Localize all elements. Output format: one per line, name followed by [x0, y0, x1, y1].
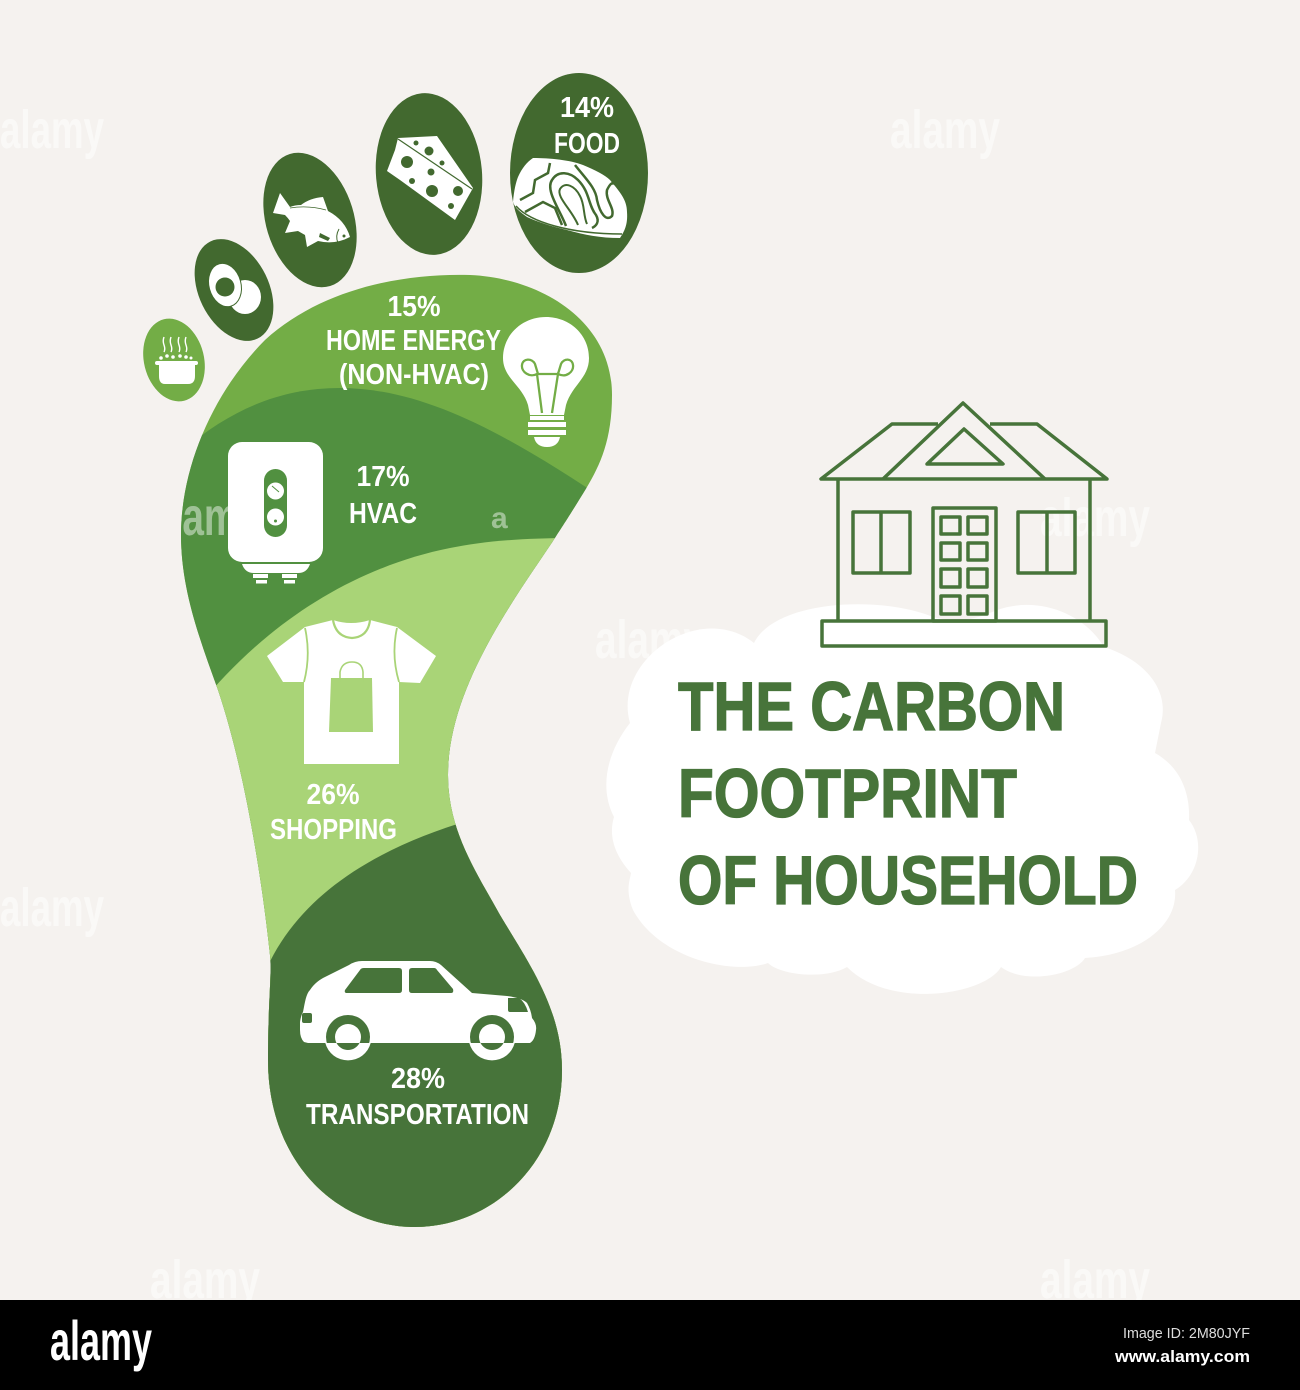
text: 14% FOOD: 14%: [560, 92, 614, 124]
footer bar: alamy: [50, 1309, 152, 1372]
icon: cheese wedge: [387, 136, 473, 220]
toe: food 14% with steak: [510, 73, 648, 273]
title: THE CARBON: [678, 668, 1065, 745]
text: 26% shopping: [270, 779, 397, 846]
cloud background: [606, 604, 1198, 994]
icon: t-shirt with shopping bag: [267, 620, 436, 764]
icon: car: [300, 961, 536, 1060]
text: 15% home energy: 15%: [388, 291, 441, 323]
foot sole with four colour bands: a: [491, 502, 508, 535]
footer bar: www.alamy.com: [1114, 1347, 1250, 1366]
toe: cheese: [369, 89, 489, 259]
text: alamy: [1040, 488, 1150, 548]
toe: cooking pot: [135, 312, 213, 408]
icon: steaming pot: [155, 337, 198, 384]
toe: fish: [248, 141, 372, 299]
text: 14% FOOD: [554, 92, 620, 160]
text: alamy: [150, 1250, 260, 1310]
text: 28% transportation: [306, 1063, 529, 1131]
text: 17% HVAC: 17%: [356, 461, 410, 493]
text: alamy: [0, 100, 104, 160]
icon: water heater (HVAC): [228, 442, 323, 584]
foot sole with four colour bands: [181, 274, 612, 1227]
toe: egg: [179, 226, 289, 354]
text: alamy: [0, 878, 104, 938]
text: alamy: [595, 610, 705, 670]
icon: house: [821, 403, 1107, 646]
icon: boiled egg: [204, 260, 261, 314]
foot sole with four colour bands: alamy: [150, 487, 260, 547]
footer bar: Image ID: 2M80JYF: [1123, 1325, 1250, 1342]
text: alamy: [1040, 1250, 1150, 1310]
icon: steak: [513, 158, 627, 238]
text: 26% shopping: SHOPPING: [270, 814, 397, 846]
icon: light bulb: [503, 317, 589, 447]
text: 15% home energy: HOME ENERGY: [326, 325, 501, 357]
text: 28% transportation: 28%: [391, 1063, 445, 1095]
text: 28% transportation: TRANSPORTATION: [306, 1099, 529, 1131]
text: 17% HVAC: [349, 461, 417, 530]
title: OF HOUSEHOLD: [678, 842, 1138, 919]
title: FOOTPRINT: [678, 755, 1017, 832]
icon: fish: [273, 193, 350, 247]
text: alamy: [890, 100, 1000, 160]
text: 15% home energy: (NON-HVAC): [339, 359, 489, 391]
footer bar: [0, 1300, 1300, 1390]
text: 14% FOOD: FOOD: [554, 128, 620, 160]
text: 26% shopping: 26%: [306, 779, 360, 811]
text: 17% HVAC: HVAC: [349, 498, 417, 530]
text: 15% home energy: [326, 291, 501, 391]
title: [678, 668, 1138, 919]
